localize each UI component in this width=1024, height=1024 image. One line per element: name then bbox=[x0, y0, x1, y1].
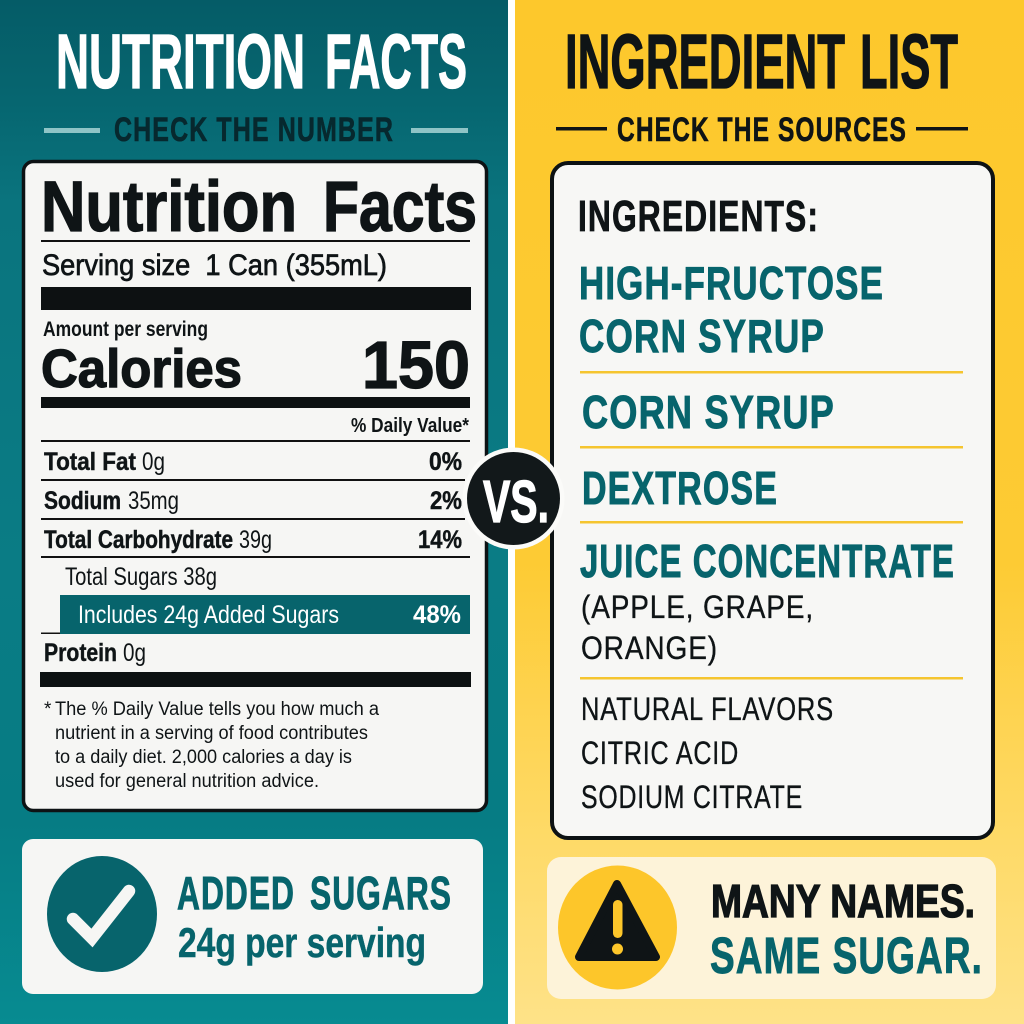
daily value header: % Daily Value* bbox=[351, 415, 469, 437]
footnote: The % Daily Value tells you how much a bbox=[55, 699, 379, 720]
icon: warning triangle bbox=[558, 866, 677, 990]
callout: added sugars: 24g per serving bbox=[178, 919, 426, 966]
row: total carbohydrate bbox=[44, 526, 462, 554]
row: added sugars highlight bbox=[41, 595, 470, 634]
panel: ingredients card bbox=[552, 163, 993, 838]
ingredient: corn syrup: CORN SYRUP bbox=[582, 386, 835, 438]
ingredient: dextrose: DEXTROSE bbox=[582, 462, 778, 514]
row: sodium bbox=[44, 487, 462, 515]
serving size: Serving size 1 Can (355mL) bbox=[42, 249, 387, 282]
ingredient: juice concentrate bbox=[580, 535, 955, 666]
row: total fat: 0g bbox=[142, 448, 165, 476]
footnote bbox=[44, 699, 379, 792]
title: nutrition facts: FACTS bbox=[325, 19, 467, 105]
minor ingredients: SODIUM CITRATE bbox=[581, 779, 803, 815]
subtitle: check the number: CHECK THE NUMBER bbox=[114, 111, 394, 149]
ingredient: high-fructose corn syrup: CORN SYRUP bbox=[579, 310, 825, 362]
icon: check mark bbox=[47, 856, 157, 972]
title: nutrition facts: NUTRITION bbox=[56, 19, 305, 105]
subtitle: check the sources: CHECK THE SOURCES bbox=[617, 111, 907, 149]
label heading: Facts bbox=[323, 168, 477, 247]
row: added sugars highlight: 48% bbox=[413, 601, 461, 629]
label heading: Nutrition bbox=[41, 168, 297, 247]
callout: added sugars bbox=[22, 839, 483, 994]
row: total fat: 0% bbox=[429, 448, 462, 476]
row: sodium: 2% bbox=[430, 487, 462, 515]
footnote: nutrient in a serving of food contributes bbox=[55, 723, 368, 744]
title: ingredient list: LIST bbox=[860, 19, 958, 105]
row: total sugars: Total Sugars 38g bbox=[65, 563, 217, 591]
footnote: used for general nutrition advice. bbox=[55, 771, 319, 792]
amount per serving: Amount per serving bbox=[43, 318, 208, 341]
callout: added sugars: SUGARS bbox=[310, 867, 452, 919]
row: total fat bbox=[44, 448, 462, 476]
calories row bbox=[41, 328, 470, 403]
row: total carbohydrate: Total Carbohydrate bbox=[44, 526, 233, 554]
ingredient: juice concentrate: ORANGE) bbox=[581, 630, 718, 666]
row: added sugars highlight: Includes 24g Added Sugars bbox=[78, 601, 339, 629]
footnote: * bbox=[44, 699, 52, 720]
ingredient: high-fructose corn syrup bbox=[579, 257, 884, 362]
calories row: Calories bbox=[41, 339, 242, 399]
row: total carbohydrate: 39g bbox=[239, 526, 272, 554]
row: total fat: Total Fat bbox=[44, 448, 137, 476]
ingredient: juice concentrate: (APPLE, GRAPE, bbox=[581, 589, 814, 625]
row: protein: Protein bbox=[44, 639, 117, 667]
minor ingredients: CITRIC ACID bbox=[581, 735, 739, 771]
callout: added sugars: ADDED bbox=[177, 867, 295, 919]
vs badge: VS. bbox=[483, 469, 549, 535]
vs badge bbox=[462, 448, 564, 550]
label heading bbox=[41, 168, 477, 247]
row: sodium: 35mg bbox=[128, 487, 179, 515]
minor ingredients: NATURAL FLAVORS bbox=[581, 691, 834, 727]
row: total carbohydrate: 14% bbox=[418, 526, 462, 554]
ingredients heading: INGREDIENTS: bbox=[578, 192, 819, 241]
footnote: to a daily diet. 2,000 calories a day is bbox=[55, 747, 352, 768]
row: sodium: Sodium bbox=[44, 487, 121, 515]
panel: nutrition facts background bbox=[0, 0, 508, 1024]
minor ingredients bbox=[581, 691, 834, 815]
calories row: 150 bbox=[362, 328, 470, 403]
row: protein: 0g bbox=[123, 639, 146, 667]
callout: many names same sugar bbox=[547, 857, 996, 999]
ingredient: high-fructose corn syrup: HIGH-FRUCTOSE bbox=[579, 257, 884, 309]
panel: ingredient list background bbox=[515, 0, 1024, 1024]
panel: nutrition label card bbox=[24, 162, 486, 810]
